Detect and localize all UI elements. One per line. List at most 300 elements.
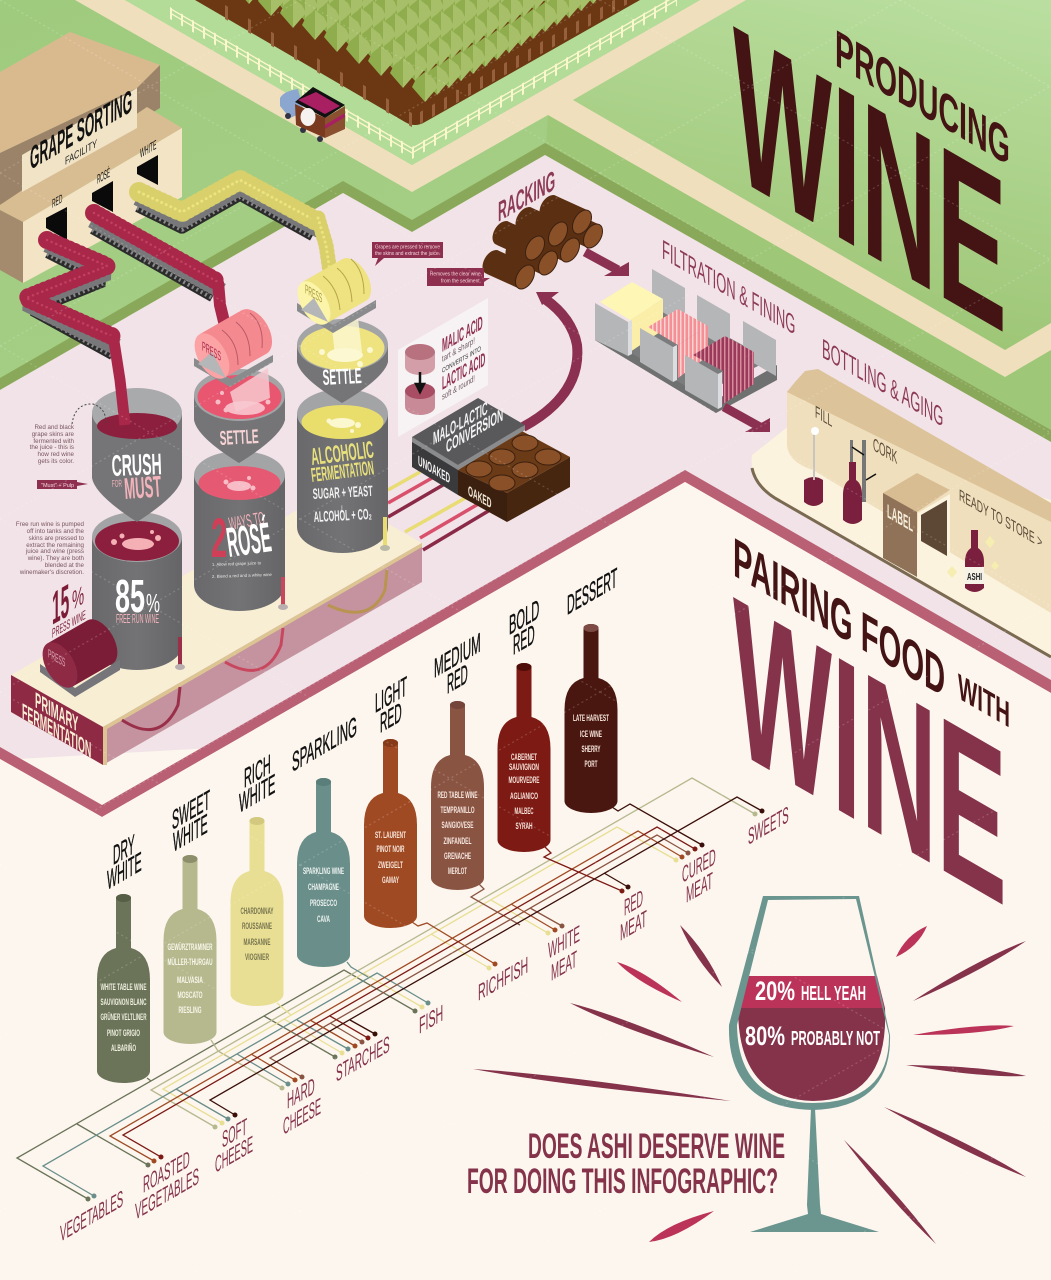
callout: racking: from the sediment. <box>441 278 481 284</box>
tank: alcoholic fermentation: SUGAR + YEAST <box>312 483 373 503</box>
barrel end <box>291 276 337 330</box>
food labels: RICHFISH <box>478 951 528 1006</box>
floor edge <box>752 468 1051 657</box>
triangle stand <box>301 298 328 322</box>
food labels: MEAT <box>686 866 713 908</box>
food labels: CHEESE <box>283 1092 321 1140</box>
tank: free run wine: FREE RUN WINE <box>116 611 159 626</box>
grape sorting building <box>0 32 182 283</box>
note: free run: extract the remaining <box>26 542 85 549</box>
note: free run: wine). They are both <box>27 555 85 562</box>
bottle: rich white: ROUSSANNE <box>242 921 272 932</box>
food labels: RED <box>624 884 643 921</box>
note: free run: off into tanks and the <box>27 528 85 535</box>
dotted arrow <box>72 404 106 424</box>
belt base <box>137 197 312 237</box>
sign <box>22 88 137 192</box>
text: MALIC ACID <box>442 312 483 357</box>
wine <box>95 521 179 561</box>
wine type headings: WHITE <box>239 768 275 819</box>
juice <box>300 326 384 370</box>
bottle: sparkling: PROSECCO <box>310 898 337 909</box>
callout: racking <box>427 268 490 286</box>
bottle: bold red: AGLIANICO <box>510 791 538 802</box>
wine type headings: RED <box>447 658 468 700</box>
light red line <box>110 831 682 1161</box>
wine type headings: MEDIUM <box>434 627 481 684</box>
bottle: bold red: MALBEC <box>514 806 534 817</box>
cab <box>280 89 304 118</box>
tubes <box>122 687 180 730</box>
fill bottle <box>804 477 823 506</box>
factory floor <box>0 143 1051 760</box>
bottle: sweet white: MALVASIA <box>177 975 203 986</box>
pink block <box>648 309 708 345</box>
wine type headings: RICH <box>244 748 271 794</box>
note: skins: grape skins are <box>32 431 75 438</box>
base <box>595 330 777 413</box>
wall <box>787 390 1051 613</box>
upper wall <box>0 65 160 205</box>
food labels: STARCHES <box>336 1030 390 1087</box>
bottle: sparkling: SPARKLING WINE <box>303 866 344 877</box>
callout: pressed: the skins and extract the juice. <box>375 251 440 257</box>
texture <box>139 180 318 222</box>
callout: pressed <box>372 242 443 266</box>
food labels: FISH <box>419 999 443 1039</box>
barrels <box>466 435 561 491</box>
pairing lines <box>17 778 762 1199</box>
juice surface <box>302 405 384 439</box>
press wine: PRESS WINE <box>52 606 86 641</box>
rose wine layer <box>738 976 885 1008</box>
valve <box>281 577 285 607</box>
floor border <box>0 143 1051 442</box>
cylinder top <box>405 352 435 375</box>
left side <box>458 470 507 522</box>
food labels: VEGETABLES <box>135 1162 199 1225</box>
bottle: dry white: PINOT GRIGIO <box>107 1028 140 1039</box>
bottle: dessert <box>564 624 618 813</box>
wine type headings: RED <box>513 618 535 661</box>
food labels: SOFT <box>222 1112 247 1153</box>
question <box>467 1127 785 1201</box>
note: skins <box>30 424 75 465</box>
wine type headings: LIGHT <box>375 670 407 719</box>
question: FOR DOING THIS INFOGRAPHIC? <box>467 1162 778 1201</box>
barrel end <box>35 636 85 694</box>
text: SWEETS <box>748 800 789 850</box>
title: pairing food with wine: WITH <box>958 665 1010 736</box>
press wine: PRESS <box>48 646 65 670</box>
tank: crush for must: MUST <box>123 470 162 506</box>
must <box>97 413 177 439</box>
wine type headings <box>107 562 617 896</box>
tank: free run wine <box>92 512 182 670</box>
wheels <box>285 113 291 119</box>
bottle: sparkling <box>297 778 350 967</box>
tank: settle yellow: SETTLE <box>322 363 362 390</box>
food labels: MEAT <box>620 904 647 946</box>
wine type headings: WHITE <box>173 808 208 858</box>
rim <box>92 512 182 562</box>
side wall <box>0 210 23 283</box>
title: producing wine <box>733 0 1010 381</box>
bottle: dry white: SAUVIGNON BLANC <box>100 997 147 1008</box>
callout: must: "Must" + Pulp <box>41 483 74 489</box>
unoaked: UNOAKED <box>418 452 450 487</box>
tank: settle rose <box>194 368 285 463</box>
wine type headings: SPARKLING <box>292 710 357 778</box>
filtration unit <box>595 269 777 413</box>
bottle: light red: PINOT NOIR <box>376 844 405 855</box>
grapes <box>139 180 318 222</box>
callout: pressed: Grapes are pressed to remove <box>375 244 440 250</box>
food labels: ROASTED <box>143 1145 190 1198</box>
down arrow <box>416 372 424 392</box>
grape sorting building: ROSÉ <box>97 164 110 187</box>
tank: settle yellow <box>297 318 388 403</box>
text: FERMENTATION <box>310 457 375 487</box>
bottle: medium red: TEMPRANILLO <box>440 805 474 816</box>
wine <box>198 375 282 419</box>
pink floor <box>0 155 1051 760</box>
bottling title: BOTTLING & AGING <box>822 333 943 433</box>
triangle stand <box>198 352 226 378</box>
rich white line <box>163 827 676 1123</box>
valve base yellow <box>380 545 390 551</box>
hell yeah: HELL YEAH <box>801 983 866 1005</box>
body <box>194 475 285 611</box>
press: white <box>291 252 378 333</box>
food labels: VEGETABLES <box>60 1184 123 1247</box>
back plates <box>652 269 685 325</box>
bottle: medium red: GRENACHE <box>444 851 471 862</box>
tank rim <box>297 389 388 439</box>
note 1: 1. Allow red grape juice to <box>212 560 262 567</box>
belt side <box>26 244 117 347</box>
food labels: CHEESE <box>215 1130 253 1178</box>
percent: % <box>146 588 160 618</box>
box left face <box>295 104 325 138</box>
sparkling line <box>43 962 428 1196</box>
valve base rose <box>278 604 288 610</box>
bottle: rich white <box>230 817 284 1006</box>
press: rose <box>187 303 279 387</box>
belt wheels <box>92 230 212 298</box>
corked bottle <box>843 462 862 524</box>
bottle: medium red: SANGIOVESE <box>442 820 474 831</box>
bottle: sweet white: MÜLLER-THURGAU <box>168 957 213 968</box>
conveyor: white <box>137 180 330 272</box>
stripes <box>325 113 345 129</box>
bottle: bold red <box>498 663 550 852</box>
grape load <box>298 92 340 114</box>
settle label: SETTLE <box>219 426 259 450</box>
probably not: PROBABLY NOT <box>791 1028 880 1050</box>
arrows <box>222 313 262 365</box>
body <box>92 537 182 670</box>
front plate 1 <box>595 303 628 356</box>
glass outline <box>729 896 890 1110</box>
tank: two ways to rose: WAYS TO <box>227 508 266 534</box>
wine type headings: WHITE <box>107 846 142 896</box>
bottle: sparkling: CAVA <box>317 914 330 925</box>
tank: alcoholic fermentation: ALCOHOL + CO₂ <box>313 506 372 526</box>
valve <box>383 517 387 547</box>
racking title: RACKING <box>498 164 555 228</box>
curved arrow to racking <box>523 292 577 427</box>
card: malic to lactic <box>398 298 488 437</box>
tank body <box>297 414 388 553</box>
text: DESSERT <box>567 562 617 621</box>
box right face <box>325 106 345 138</box>
front plate 2 <box>640 328 673 382</box>
note: free run <box>16 521 85 576</box>
rim <box>194 369 285 421</box>
cylinder bottom <box>405 391 435 415</box>
rays <box>473 925 1026 1244</box>
note: free run: blended at the <box>45 562 85 569</box>
texture <box>94 213 218 282</box>
bottling line <box>752 369 1051 657</box>
bottle: dessert: ICE WINE <box>580 729 602 740</box>
bottle: rich white: MARSANNE <box>244 937 270 948</box>
pairing zone <box>0 470 1051 1280</box>
pipes to malo-lactic <box>388 472 490 550</box>
bottle: light red: ST. LAURENT <box>375 830 406 841</box>
rim <box>297 319 388 371</box>
grape sorting building: WHITE <box>140 136 157 161</box>
bottle: rich white: VIOGNIER <box>245 952 269 963</box>
funnel body <box>297 345 388 403</box>
note: free run: skins are pressed to <box>29 535 85 542</box>
fill needle <box>813 434 815 480</box>
soil <box>195 0 640 125</box>
arrow to bottling <box>724 407 770 432</box>
callout: must <box>37 480 88 489</box>
text: ROSÉ <box>224 513 274 566</box>
wine type headings: RED <box>380 696 402 739</box>
bottle: dry white <box>97 894 150 1083</box>
tray <box>40 660 120 697</box>
barrel body <box>212 332 254 356</box>
falling juice <box>332 318 362 356</box>
wine <box>198 466 280 500</box>
note: skins: Red and black <box>34 424 75 431</box>
wine glass poll <box>729 896 890 1232</box>
bottle: sweet white: MOSCATO <box>178 990 202 1001</box>
fill label: FILL <box>815 402 832 431</box>
valve base maroon <box>175 664 185 670</box>
sweet white line <box>151 778 755 1127</box>
bottle: bold red: MOURVEDRE <box>508 775 540 786</box>
cork label: CORK <box>873 434 897 468</box>
floor <box>752 425 1051 656</box>
dessert line <box>210 797 762 1115</box>
vine stakes <box>225 12 415 122</box>
tank: two ways to rose <box>194 451 285 611</box>
maroon wine layer <box>738 1008 885 1101</box>
ashi word: ASHI <box>967 572 982 583</box>
tank: crush for must: CRUSH <box>111 448 162 483</box>
vineyard <box>125 0 700 165</box>
note: skins: the juice - this is <box>30 444 74 451</box>
bottle: dry white: ALBARIÑO <box>111 1043 136 1054</box>
valve <box>178 637 182 667</box>
grapes <box>26 240 116 338</box>
note: free run: Free run wine is pumped <box>16 521 85 528</box>
right fence <box>412 0 677 153</box>
white end <box>300 108 316 126</box>
foam <box>216 391 270 415</box>
belt side <box>92 220 222 291</box>
bottle: light red: GAMAY <box>382 875 399 886</box>
press wine <box>35 573 125 697</box>
note: skins: fermented with <box>33 438 75 445</box>
note: skins: how red wine <box>38 451 75 458</box>
pairing dots <box>86 808 764 1202</box>
vines <box>236 0 642 102</box>
texture <box>26 240 116 338</box>
cream block <box>600 282 663 320</box>
funnel <box>194 395 285 463</box>
title: pairing food with wine <box>733 525 1010 954</box>
pour texture <box>318 218 330 272</box>
truck <box>280 87 345 142</box>
platform: primary fermentation: PRIMARY <box>35 687 78 737</box>
fill spray <box>811 427 819 435</box>
side <box>412 437 458 495</box>
note 2: 2. Blend a red and a white wine <box>212 572 273 579</box>
wine type headings: BOLD <box>509 593 539 641</box>
lid edge <box>412 425 525 470</box>
filtration title: FILTRATION & FINING <box>662 234 795 341</box>
converts: CONVERTS INTO <box>442 345 481 375</box>
labeller <box>883 473 950 512</box>
tray <box>297 300 376 333</box>
grape sorting building: GRAPE SORTING <box>30 82 132 177</box>
bottle: medium red: MERLOT <box>448 866 467 877</box>
falling juice <box>230 368 270 412</box>
pour <box>113 335 125 425</box>
grapes <box>94 213 218 282</box>
press label: PRESS <box>202 338 221 364</box>
food labels: CURED <box>682 842 716 888</box>
band <box>0 470 1051 817</box>
bottle: dessert: SHERRY <box>582 744 601 755</box>
malo: MALO-LACTIC <box>433 397 488 449</box>
numeral 2: 2 <box>211 506 227 569</box>
tank: alcoholic fermentation <box>297 389 388 553</box>
arrows <box>323 259 364 310</box>
bottle: sweet white: RIESLING <box>178 1005 202 1016</box>
food labels: WHITE <box>548 919 580 964</box>
note: free run: winemaker's discretion. <box>19 569 84 576</box>
bottle: dry white: GRÜNER VELTLINER <box>100 1012 147 1023</box>
bottle: bold red: CABERNET <box>511 752 537 763</box>
front plate 3 <box>685 355 718 409</box>
belt wheels <box>32 254 112 356</box>
barrel end <box>187 327 237 385</box>
percent: % <box>72 579 84 616</box>
lower-right field <box>545 115 1051 450</box>
foam <box>319 347 373 367</box>
note: free run: juice and wine (press <box>25 548 84 555</box>
oaked label: OAKED <box>468 482 491 512</box>
doors <box>46 207 67 240</box>
soft: soft & round! <box>442 373 475 402</box>
wine type headings: SWEET <box>172 784 210 836</box>
wall top <box>787 369 1051 522</box>
pour <box>318 218 330 272</box>
belt side <box>137 188 322 232</box>
food labels <box>60 800 789 1247</box>
conversion: CONVERSION <box>446 404 503 457</box>
tank: alcoholic fermentation: ALCOHOLIC <box>309 436 375 471</box>
grape sorting building: RED <box>52 191 63 211</box>
platform: primary fermentation: FERMENTATION <box>22 698 91 763</box>
conveyor: rose <box>92 213 226 330</box>
upper-right field <box>573 0 1051 350</box>
press: white: PRESS <box>305 281 322 306</box>
platform: primary fermentation <box>11 491 422 765</box>
shelf <box>0 107 182 222</box>
bottle: sweet white <box>164 855 216 1044</box>
belt base <box>32 254 112 356</box>
oak barrel crate <box>458 430 570 522</box>
bold red line <box>123 827 695 1157</box>
bottle: dessert: LATE HARVEST <box>573 713 609 724</box>
bottle label <box>965 567 984 584</box>
rim <box>194 451 285 499</box>
food labels: HARD <box>287 1072 315 1114</box>
bottle: rich white: CHARDONNAY <box>240 906 274 917</box>
tray <box>194 355 273 387</box>
bottle: medium red: ZINFANDEL <box>444 836 472 847</box>
lid <box>412 398 525 465</box>
bottle: bold red: SYRAH <box>516 821 533 832</box>
malo-lactic box <box>412 397 525 495</box>
bubbles <box>224 476 256 491</box>
platform top <box>11 491 422 727</box>
barrel body <box>314 280 354 303</box>
conveyor: red <box>26 240 125 425</box>
left fence <box>170 8 412 153</box>
medium red line <box>270 835 688 1077</box>
dry white line <box>17 970 415 1199</box>
85: 85 <box>115 570 145 622</box>
pour <box>218 282 226 330</box>
racking barrels <box>479 192 606 292</box>
wine type headings: DRY <box>113 828 135 871</box>
platform right face <box>103 543 422 765</box>
barrel body <box>60 642 100 665</box>
bottling line: LABEL <box>887 501 913 537</box>
note: skins: gets its color. <box>38 458 74 465</box>
bottle: dry white: WHITE TABLE WINE <box>100 982 146 993</box>
tank: crush for must <box>92 388 182 522</box>
food labels: MEAT <box>551 945 577 986</box>
sparkles <box>947 536 999 578</box>
cream field <box>0 482 1051 1280</box>
right side <box>507 457 570 522</box>
belt wheels <box>137 197 312 237</box>
top <box>458 430 570 493</box>
farmland background <box>0 0 1051 450</box>
question: DOES ASHI DESERVE WINE <box>528 1127 785 1166</box>
roof <box>0 32 160 153</box>
